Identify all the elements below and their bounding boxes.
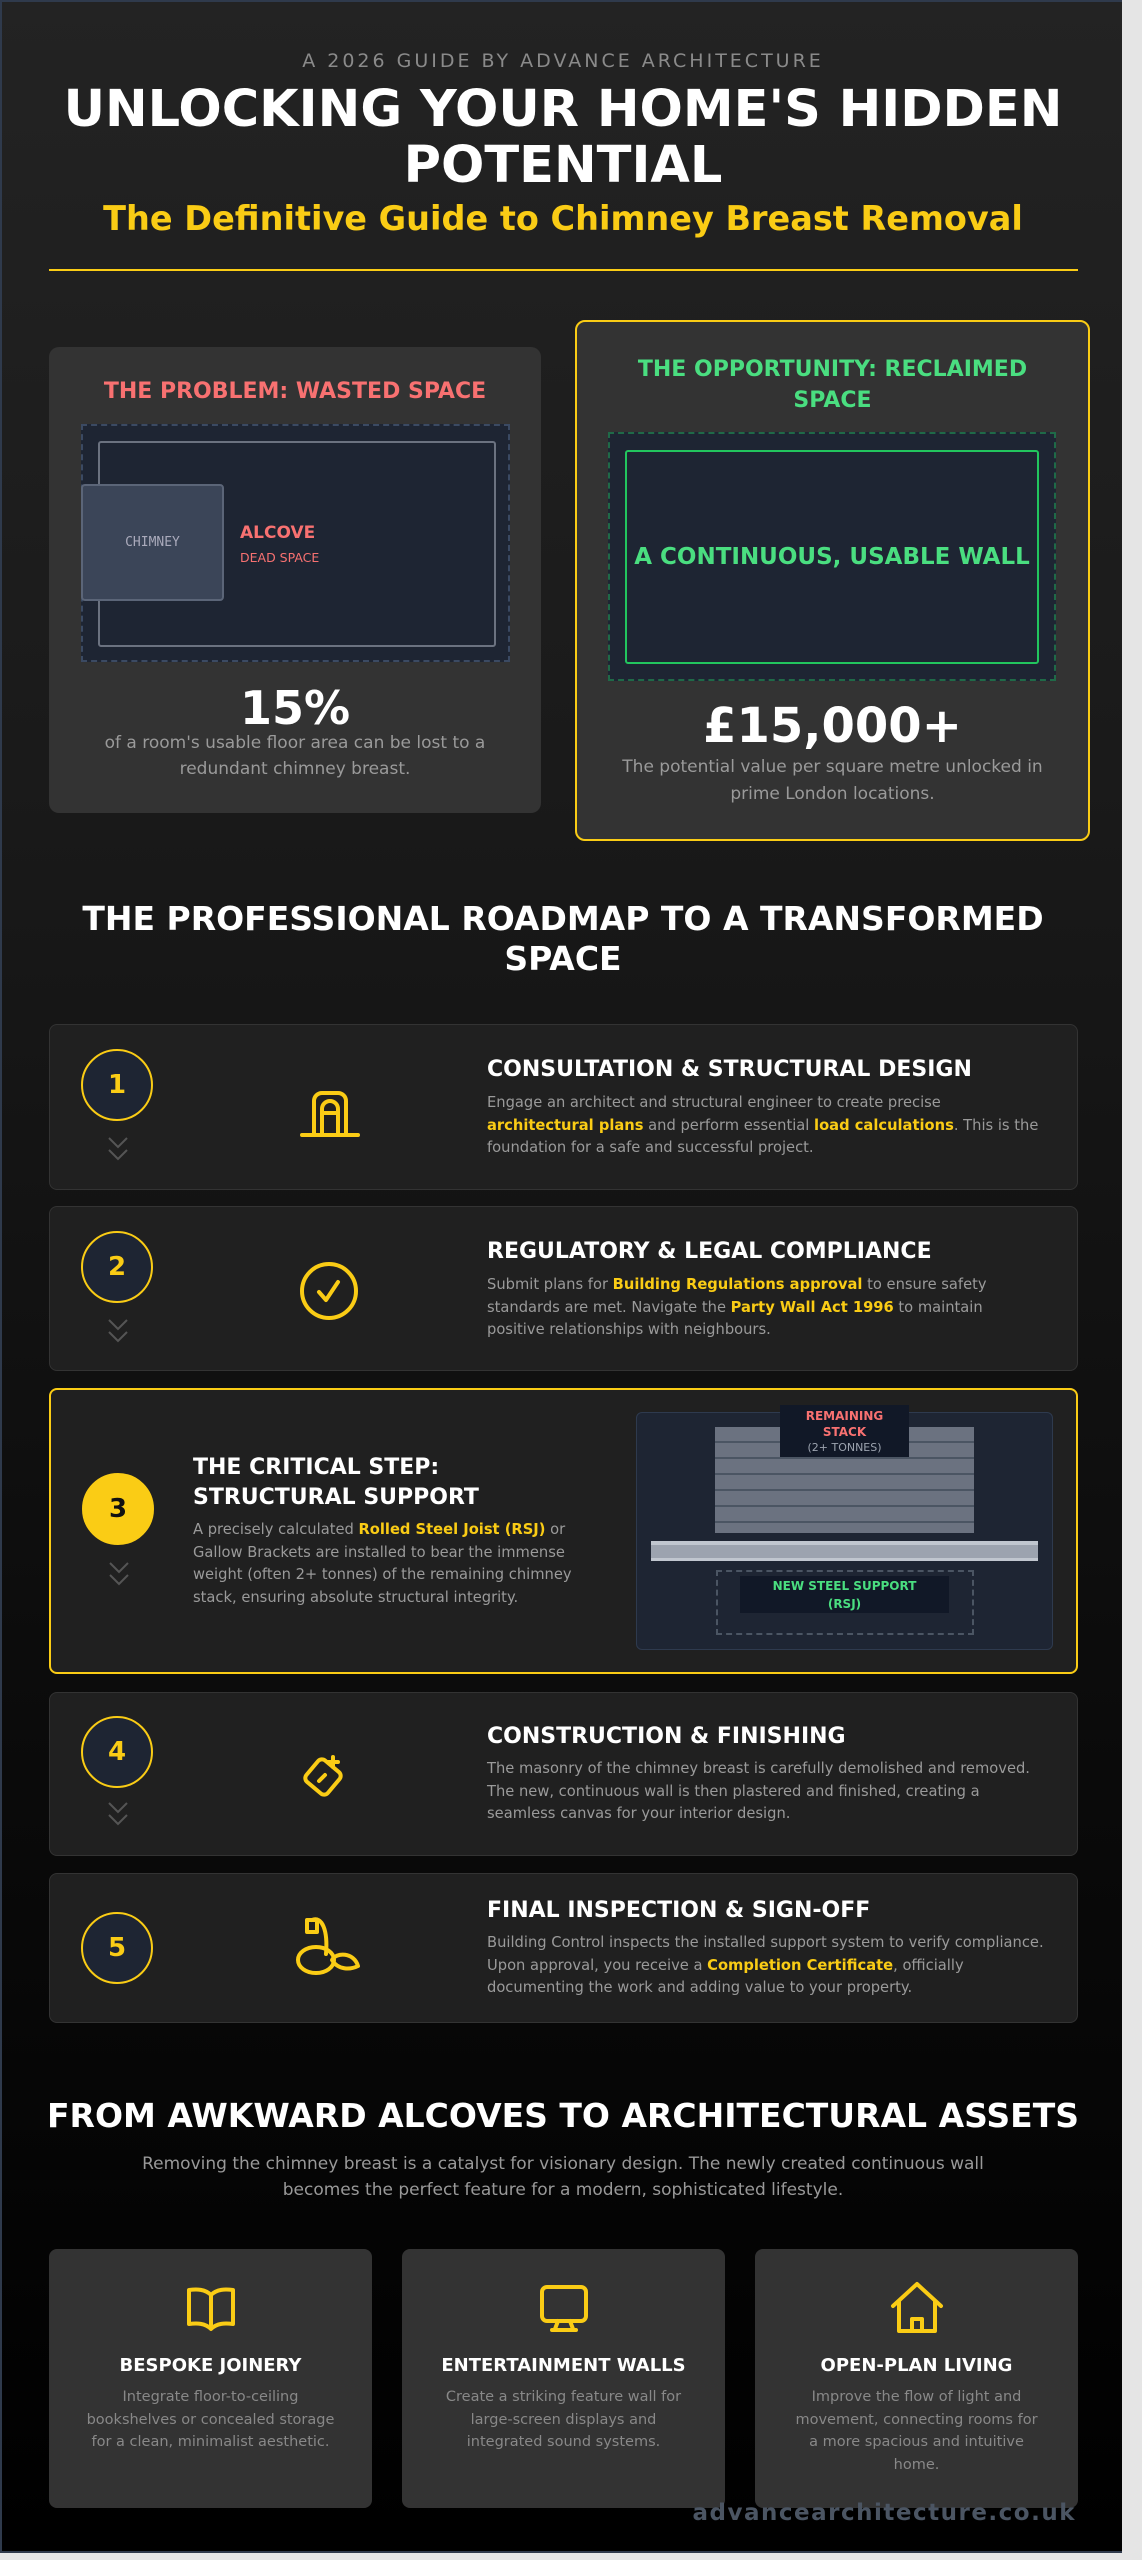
- problem heading: THE PROBLEM: WASTED SPACE: [104, 379, 486, 404]
- icon: screen: [540, 2285, 588, 2332]
- step 5 text: Upon approval, you receive a Completion Certificate, officially: [487, 1956, 964, 1974]
- feature: joinery: Integrate floor-to-ceiling: [123, 2389, 298, 2405]
- chimney block: [81, 484, 224, 601]
- number 3: [82, 1473, 154, 1545]
- feature: joinery: [49, 2249, 372, 2508]
- number 2: 2: [108, 1252, 126, 1282]
- feature: open plan: home.: [894, 2456, 939, 2472]
- number 1: [81, 1049, 153, 1121]
- step 2 text: [487, 1276, 987, 1338]
- step 2 text: Submit plans for Building Regulations approval to ensure safety: [487, 1276, 987, 1293]
- stat text: The potential value per square metre unlocked in prime London locations.: [622, 757, 1043, 804]
- step 1 text: foundation for a safe and successful project.: [487, 1139, 814, 1156]
- feature: open plan: a more spacious and intuitive: [809, 2434, 1024, 2450]
- diagram: continuous wall: [608, 432, 1056, 681]
- feature: entertainment: ENTERTAINMENT WALLS: [441, 2355, 686, 2376]
- step 3 text: Gallow Brackets are installed to bear the immense: [193, 1544, 565, 1560]
- step 4 text: seamless canvas for your interior design.: [487, 1805, 790, 1822]
- feature: joinery: bookshelves or concealed storage: [87, 2412, 334, 2428]
- stack label: [780, 1405, 909, 1457]
- step 3 title: THE CRITICAL STEP:: [193, 1455, 439, 1480]
- stat text: of a room's usable floor area can be lost to a redundant chimney breast.: [105, 733, 485, 779]
- icon: tool: [303, 1755, 343, 1797]
- subtitle: The Definitive Guide to Chimney Breast Removal: [103, 199, 1023, 238]
- number 4: 4: [108, 1737, 126, 1767]
- steel support label: (RSJ): [828, 1597, 861, 1611]
- feature: joinery: for a clean, minimalist aesthetic.: [92, 2434, 330, 2450]
- panel: opportunity: [575, 320, 1090, 841]
- stack label: REMAINING: [806, 1409, 883, 1423]
- feature: entertainment: integrated sound systems.: [467, 2434, 660, 2450]
- number 5: 5: [108, 1933, 126, 1963]
- header eyebrow: A 2026 GUIDE BY ADVANCE ARCHITECTURE: [302, 50, 824, 72]
- step 4: [49, 1692, 1078, 1856]
- footer url: advancearchitecture.co.uk: [693, 2500, 1076, 2526]
- assets heading: FROM AWKWARD ALCOVES TO ARCHITECTURAL ASSETS: [47, 2096, 1079, 2135]
- diagram: continuous wall: A CONTINUOUS, USABLE WALL: [634, 544, 1030, 570]
- number 1: 1: [108, 1070, 126, 1100]
- chimney block: CHIMNEY: [125, 535, 180, 550]
- number 2: [81, 1231, 153, 1303]
- step 1 text: architectural plans and perform essential load calculations. This is the: [487, 1116, 1038, 1134]
- number 3: 3: [109, 1494, 127, 1524]
- step 2 text: standards are met. Navigate the Party Wall Act 1996 to maintain: [487, 1298, 983, 1316]
- feature: entertainment: [402, 2249, 725, 2508]
- feature: open plan: [755, 2249, 1078, 2508]
- step 3 text: weight (often 2+ tonnes) of the remaining chimney: [193, 1566, 572, 1583]
- step 1 text: Engage an architect and structural engineer to create precise: [487, 1094, 941, 1111]
- feature: entertainment: Create a striking feature wall for: [446, 2389, 681, 2405]
- roadmap heading: THE PROFESSIONAL ROADMAP TO A TRANSFORMED SPACE: [82, 899, 1044, 978]
- step 1: [49, 1024, 1078, 1190]
- step 5 text: Building Control inspects the installed support system to verify compliance.: [487, 1934, 1044, 1951]
- stat £15,000+: £15,000+: [703, 698, 962, 754]
- step 2 text: positive relationships with neighbours.: [487, 1321, 771, 1338]
- diagram: chimney: [81, 424, 510, 662]
- step 3: [49, 1388, 1078, 1674]
- icon: check: [300, 1262, 358, 1320]
- title: POTENTIAL: [404, 136, 722, 195]
- feature: open plan: movement, connecting rooms for: [795, 2412, 1038, 2428]
- stack: [715, 1427, 974, 1533]
- step 1 title: CONSULTATION & STRUCTURAL DESIGN: [487, 1057, 972, 1082]
- diagram: chimney: DEAD SPACE: [240, 550, 319, 565]
- assets intro: Removing the chimney breast is a catalyst for visionary design. The newly created continuous wall becomes the perfect feature for a modern, sophisticated lifestyle.: [142, 2154, 984, 2200]
- number 5: [81, 1912, 153, 1984]
- step 3 text: [193, 1521, 572, 1606]
- feature: joinery: BESPOKE JOINERY: [120, 2355, 301, 2376]
- step 3 title: STRUCTURAL SUPPORT: [193, 1485, 479, 1510]
- step 2 title: REGULATORY & LEGAL COMPLIANCE: [487, 1239, 932, 1264]
- feature: entertainment: large-screen displays and: [471, 2412, 656, 2428]
- feature: open plan: OPEN-PLAN LIVING: [821, 2355, 1012, 2376]
- opportunity heading: THE OPPORTUNITY: RECLAIMED SPACE: [638, 357, 1027, 413]
- alcove label: ALCOVE: [240, 523, 315, 543]
- stack label: (2+ TONNES): [807, 1441, 882, 1454]
- step 4 text: The new, continuous wall is then plastered and finished, creating a: [487, 1782, 980, 1800]
- icon: arch: [300, 1091, 360, 1137]
- panel: problem: [49, 347, 541, 813]
- step 1 text: [487, 1094, 1038, 1156]
- diagram: RSJ: [636, 1412, 1053, 1650]
- steel support label: NEW STEEL SUPPORT: [773, 1579, 916, 1593]
- step 4 text: [486, 1760, 1030, 1822]
- title: UNLOCKING YOUR HOME'S HIDDEN: [64, 80, 1062, 139]
- step 3 text: stack, ensuring absolute structural integrity.: [193, 1588, 518, 1606]
- step 4 text: The masonry of the chimney breast is carefully demolished and removed.: [487, 1760, 1030, 1777]
- stat 15%: 15%: [240, 681, 350, 735]
- beam: [651, 1541, 1038, 1561]
- icon: house: [890, 2282, 944, 2333]
- step 5 text: [487, 1934, 1044, 1996]
- steel support label: [716, 1570, 974, 1635]
- icon: book: [187, 2288, 235, 2332]
- icon: inspection: [296, 1917, 360, 1975]
- step 5 text: documenting the work and adding value to your property.: [487, 1979, 912, 1996]
- step 5 title: FINAL INSPECTION & SIGN-OFF: [487, 1898, 870, 1923]
- step 5: [49, 1873, 1078, 2023]
- step 2: [49, 1206, 1078, 1371]
- stack label: STACK: [823, 1425, 866, 1439]
- step 3 text: A precisely calculated Rolled Steel Joist (RSJ) or: [193, 1521, 565, 1538]
- chevrons: [108, 1137, 128, 1160]
- step 4 title: CONSTRUCTION & FINISHING: [487, 1724, 846, 1749]
- step 3 title: [193, 1455, 479, 1510]
- feature: open plan: Improve the flow of light and: [812, 2389, 1021, 2405]
- number 4: [81, 1716, 153, 1788]
- title: [64, 80, 1062, 195]
